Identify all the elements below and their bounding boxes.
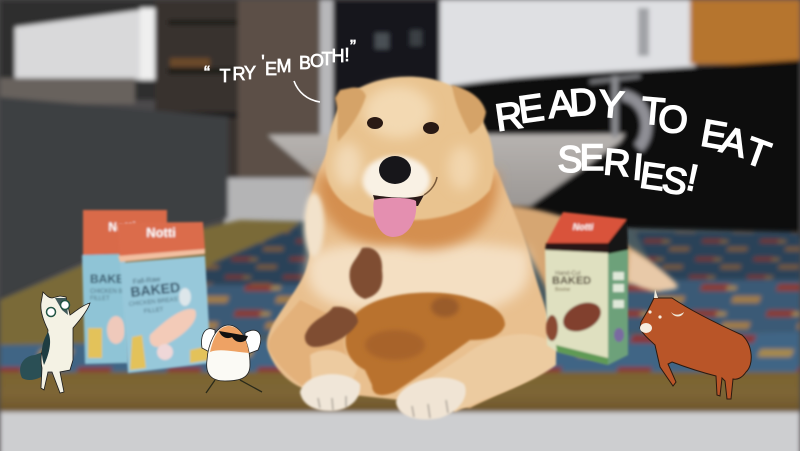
- toy antler upper: [350, 247, 382, 299]
- cow snout: [640, 323, 652, 333]
- carpet: [0, 220, 800, 451]
- brand label: Notti: [573, 222, 594, 232]
- illustration: brown cow: [640, 289, 751, 399]
- right foreleg: [420, 334, 556, 412]
- right eye: [423, 122, 439, 134]
- cat body: [41, 292, 90, 393]
- caption pointer arrow: [294, 81, 320, 102]
- mouth: [373, 195, 424, 206]
- egg arms: [202, 329, 261, 355]
- treat box back: chicken breast: [82, 210, 167, 364]
- dog hind body and tail: [505, 205, 678, 305]
- forehead highlight: [364, 86, 432, 138]
- left eye: [367, 117, 383, 129]
- golden retriever dog: [267, 77, 678, 419]
- treat box back: chicken breast: CHICKEN BREAST: [90, 289, 143, 295]
- cat tail: [20, 350, 48, 380]
- egg body: [207, 325, 250, 381]
- toy: plush brown: [305, 247, 505, 395]
- left paw: [300, 374, 360, 411]
- right ear: [452, 85, 486, 134]
- left ear: [335, 87, 366, 142]
- cat glasses: [46, 308, 56, 316]
- cow eyes: [648, 310, 652, 314]
- illustration: cat: [20, 292, 90, 393]
- muzzle: [362, 156, 430, 204]
- orange mane: [317, 170, 498, 249]
- product name: BAKED: [552, 275, 591, 287]
- left white fur: [304, 193, 324, 257]
- toy antler lower: [305, 307, 358, 347]
- right paw: [396, 378, 466, 419]
- nose: [379, 156, 411, 184]
- treat box right: beef: Bovine: [555, 287, 571, 293]
- treat box front: chicken breast: CHICKEN BREAST: [129, 296, 182, 308]
- caption: "Try 'Em Both!": “TRY 'EM BOTH!”: [204, 37, 356, 86]
- illustration: egg with sunglasses: [202, 325, 262, 393]
- back box label: BAKED: [90, 272, 133, 286]
- treat box right: beef: Hand-Cut: [555, 271, 581, 277]
- cow horns: [654, 289, 684, 316]
- egg legs: [206, 380, 262, 393]
- dog body: [267, 130, 555, 408]
- tongue: [373, 198, 416, 237]
- chicken fillet image: [150, 309, 196, 347]
- product name: Fall-Raw: [132, 276, 162, 286]
- inner leg pale: [310, 350, 358, 385]
- head: [326, 77, 494, 220]
- treat box front: chicken breast: [117, 222, 211, 373]
- treat box back: chicken breast: Notti: [108, 220, 136, 234]
- beef image: [558, 297, 606, 337]
- treat box front: chicken breast: FILLET: [144, 307, 164, 315]
- sunglasses: [219, 331, 248, 342]
- cream chest: [307, 241, 530, 315]
- caption: Series!: SERIES!: [558, 137, 702, 203]
- brand label: Notti: [146, 225, 176, 240]
- left foreleg: [268, 300, 352, 392]
- caption: Ready To Eat: READY TO EAT: [493, 81, 775, 177]
- egg yolk: [210, 326, 249, 353]
- treat box right: beef: [545, 212, 628, 365]
- treat box front: chicken breast: BAKED: [130, 279, 181, 300]
- treat box back: chicken breast: FILLET: [90, 296, 110, 302]
